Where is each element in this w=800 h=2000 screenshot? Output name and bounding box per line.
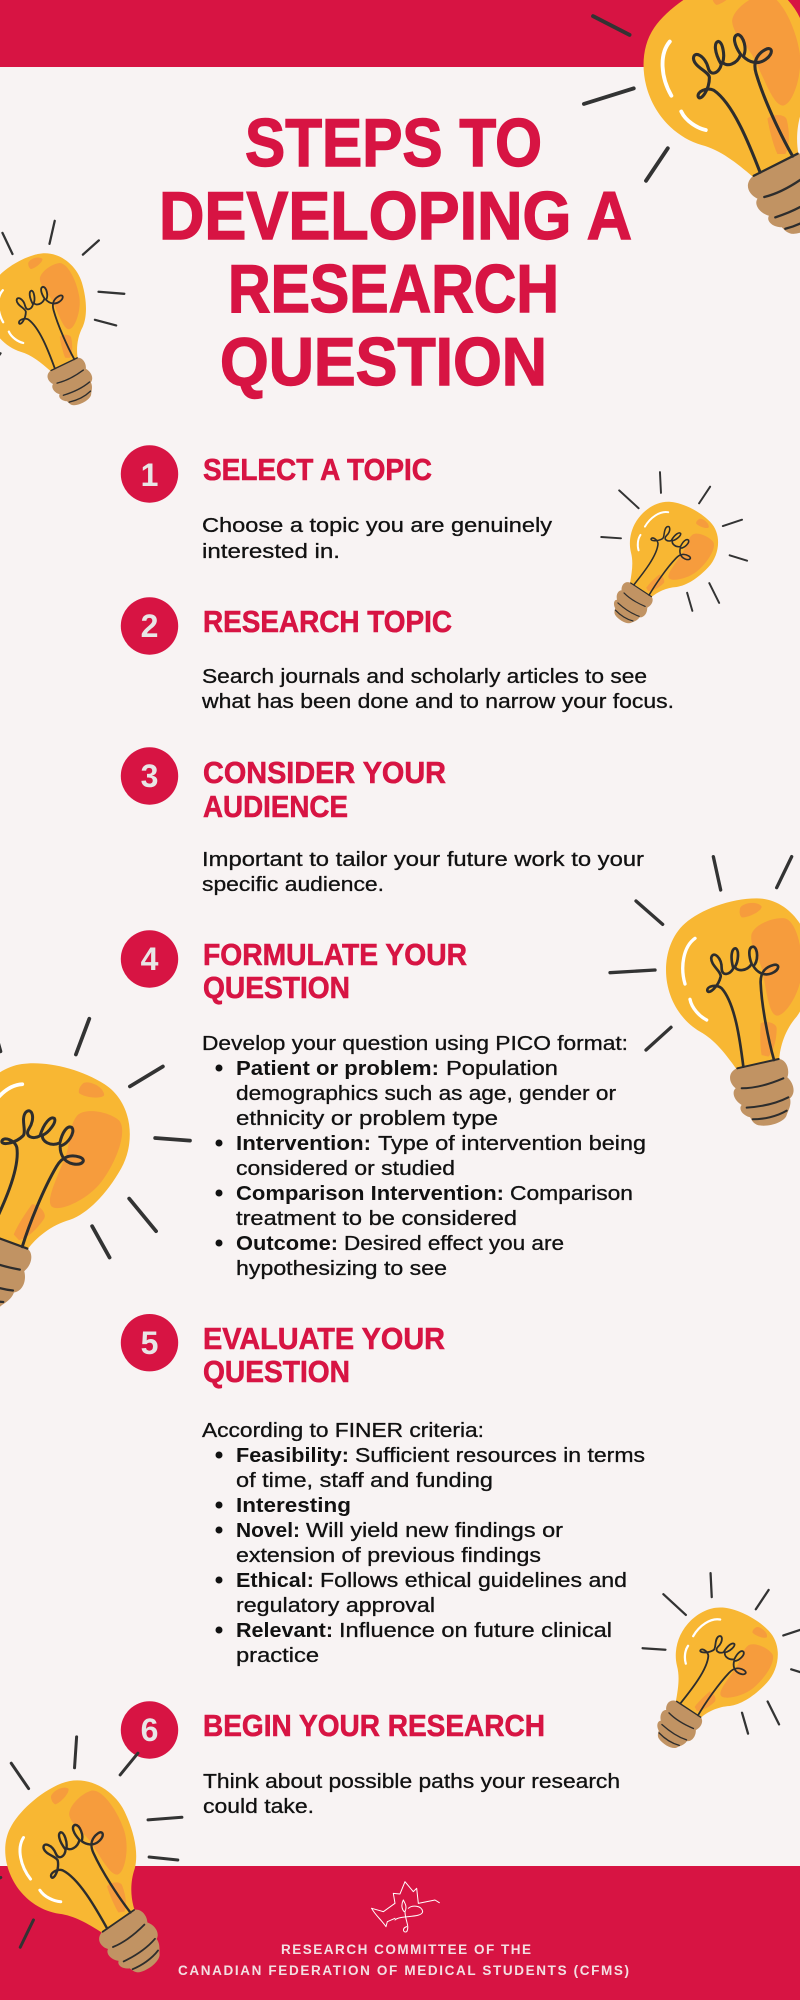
step 4 PICO list: considered or studied <box>236 1158 455 1180</box>
step 3 number badge: 3 <box>141 758 158 794</box>
step 5 FINER list <box>216 1445 645 1667</box>
step 4 PICO list: Comparison <box>510 1183 633 1205</box>
step 4 PICO list: Outcome: <box>236 1233 338 1255</box>
step 5 heading: EVALUATE YOUR <box>203 1321 445 1356</box>
step 4 heading: FORMULATE YOUR <box>203 937 467 972</box>
step 4 number badge <box>121 930 178 988</box>
header band <box>0 0 800 67</box>
step 5 heading <box>203 1321 445 1389</box>
step 4 PICO list: ethnicity or problem type <box>236 1108 498 1130</box>
step 3 heading: CONSIDER YOUR <box>203 755 446 790</box>
step 4 PICO list: demographics such as age, gender or <box>236 1083 616 1105</box>
step 6 number badge <box>121 1701 178 1759</box>
step 6 description <box>203 1771 620 1818</box>
title <box>159 105 632 400</box>
step 5 FINER list: Influence on future clinical <box>339 1620 612 1642</box>
icon: light bulb right of step 5 list <box>589 1540 800 1791</box>
icon: light bulb right of step 4 <box>610 857 800 1126</box>
step 5 number badge <box>121 1314 178 1371</box>
title: STEPS TO <box>245 105 542 181</box>
icon: light bulb bottom left <box>0 1712 230 2000</box>
step 3 number badge <box>121 747 178 805</box>
step 5 FINER list: Relevant: <box>236 1620 333 1642</box>
step 4 PICO list: Intervention: <box>236 1133 371 1155</box>
step 1 description: interested in. <box>202 541 340 563</box>
icon: light bulb beside step 1 <box>555 443 773 661</box>
step 5 FINER list: Feasibility: <box>236 1445 349 1467</box>
title: DEVELOPING A <box>159 178 632 254</box>
step 2 description: what has been done and to narrow your focus. <box>201 691 674 713</box>
step 5 FINER list: regulatory approval <box>236 1595 435 1617</box>
title: QUESTION <box>220 324 547 400</box>
step 2: research topic <box>121 597 674 713</box>
step 4: formulate your question <box>121 930 646 1280</box>
step 2 number badge: 2 <box>141 608 158 644</box>
step 3 description <box>202 849 644 896</box>
step 4 PICO list: Population <box>446 1058 558 1080</box>
step 1: select a topic <box>121 445 552 563</box>
step 1 description <box>202 515 552 563</box>
step 4 PICO list: treatment to be considered <box>236 1208 517 1230</box>
step 5 FINER list: Novel: <box>236 1520 300 1542</box>
step 4 PICO list <box>216 1058 646 1280</box>
step 2 number badge <box>121 597 178 655</box>
step 5 FINER list: Follows ethical guidelines and <box>320 1570 627 1592</box>
icon: light bulb left of step 4 list <box>0 956 233 1365</box>
step 5 heading: QUESTION <box>203 1354 350 1389</box>
step 6: begin your research <box>121 1701 620 1818</box>
step 4 PICO list: hypothesizing to see <box>236 1258 447 1280</box>
step 5 FINER intro: According to FINER criteria: <box>202 1420 484 1442</box>
step 3 heading <box>203 755 446 824</box>
step 3 description: Important to tailor your future work to your <box>202 849 644 871</box>
step 4 heading: QUESTION <box>203 970 350 1005</box>
icon: light bulb top right <box>551 0 800 276</box>
step 5 FINER list: Ethical: <box>236 1570 314 1592</box>
step 6 description: Think about possible paths your research <box>203 1771 620 1793</box>
title: RESEARCH <box>228 251 559 327</box>
step 6 heading: BEGIN YOUR RESEARCH <box>203 1708 545 1743</box>
step 2 description <box>201 666 674 713</box>
footer band <box>0 1866 800 2000</box>
step 4 PICO list: Patient or problem: <box>236 1058 439 1080</box>
footer text <box>178 1942 629 1978</box>
step 1 heading: SELECT A TOPIC <box>203 452 432 487</box>
footer logo: maple leaf <box>372 1882 439 1932</box>
step 4 PICO list: Type of intervention being <box>378 1133 646 1155</box>
icon: light bulb left of title <box>0 209 146 428</box>
step 1 number badge: 1 <box>141 457 158 493</box>
step 3 description: specific audience. <box>202 874 384 896</box>
step 4 PICO intro: Develop your question using PICO format: <box>202 1033 628 1055</box>
step 4 heading <box>203 937 467 1005</box>
step 2 description: Search journals and scholarly articles to see <box>202 666 647 688</box>
step 6 number badge: 6 <box>141 1712 158 1748</box>
step 5 FINER list: extension of previous findings <box>236 1545 541 1567</box>
step 5 FINER list: Interesting <box>236 1495 351 1517</box>
step 4 number badge: 4 <box>141 941 159 977</box>
step 5 FINER list: practice <box>236 1645 319 1667</box>
step 5 number badge: 5 <box>141 1325 158 1361</box>
step 3: consider your audience <box>121 747 644 896</box>
step 5 FINER list: of time, staff and funding <box>236 1470 493 1492</box>
step 1 number badge <box>121 445 178 503</box>
step 2 heading: RESEARCH TOPIC <box>203 604 452 639</box>
step 5 FINER list: Sufficient resources in terms <box>355 1445 645 1467</box>
step 5 FINER list: Will yield new findings or <box>306 1520 563 1542</box>
step 1 description: Choose a topic you are genuinely <box>202 515 552 537</box>
step 5: evaluate your question <box>121 1314 645 1667</box>
step 4 PICO list: Desired effect you are <box>344 1233 564 1255</box>
step 3 heading: AUDIENCE <box>203 789 348 824</box>
step 4 PICO list: Comparison Intervention: <box>236 1183 504 1205</box>
step 6 description: could take. <box>203 1796 314 1818</box>
footer text: RESEARCH COMMITTEE OF THE <box>281 1942 531 1957</box>
footer text: CANADIAN FEDERATION OF MEDICAL STUDENTS (CFMS) <box>178 1963 629 1978</box>
